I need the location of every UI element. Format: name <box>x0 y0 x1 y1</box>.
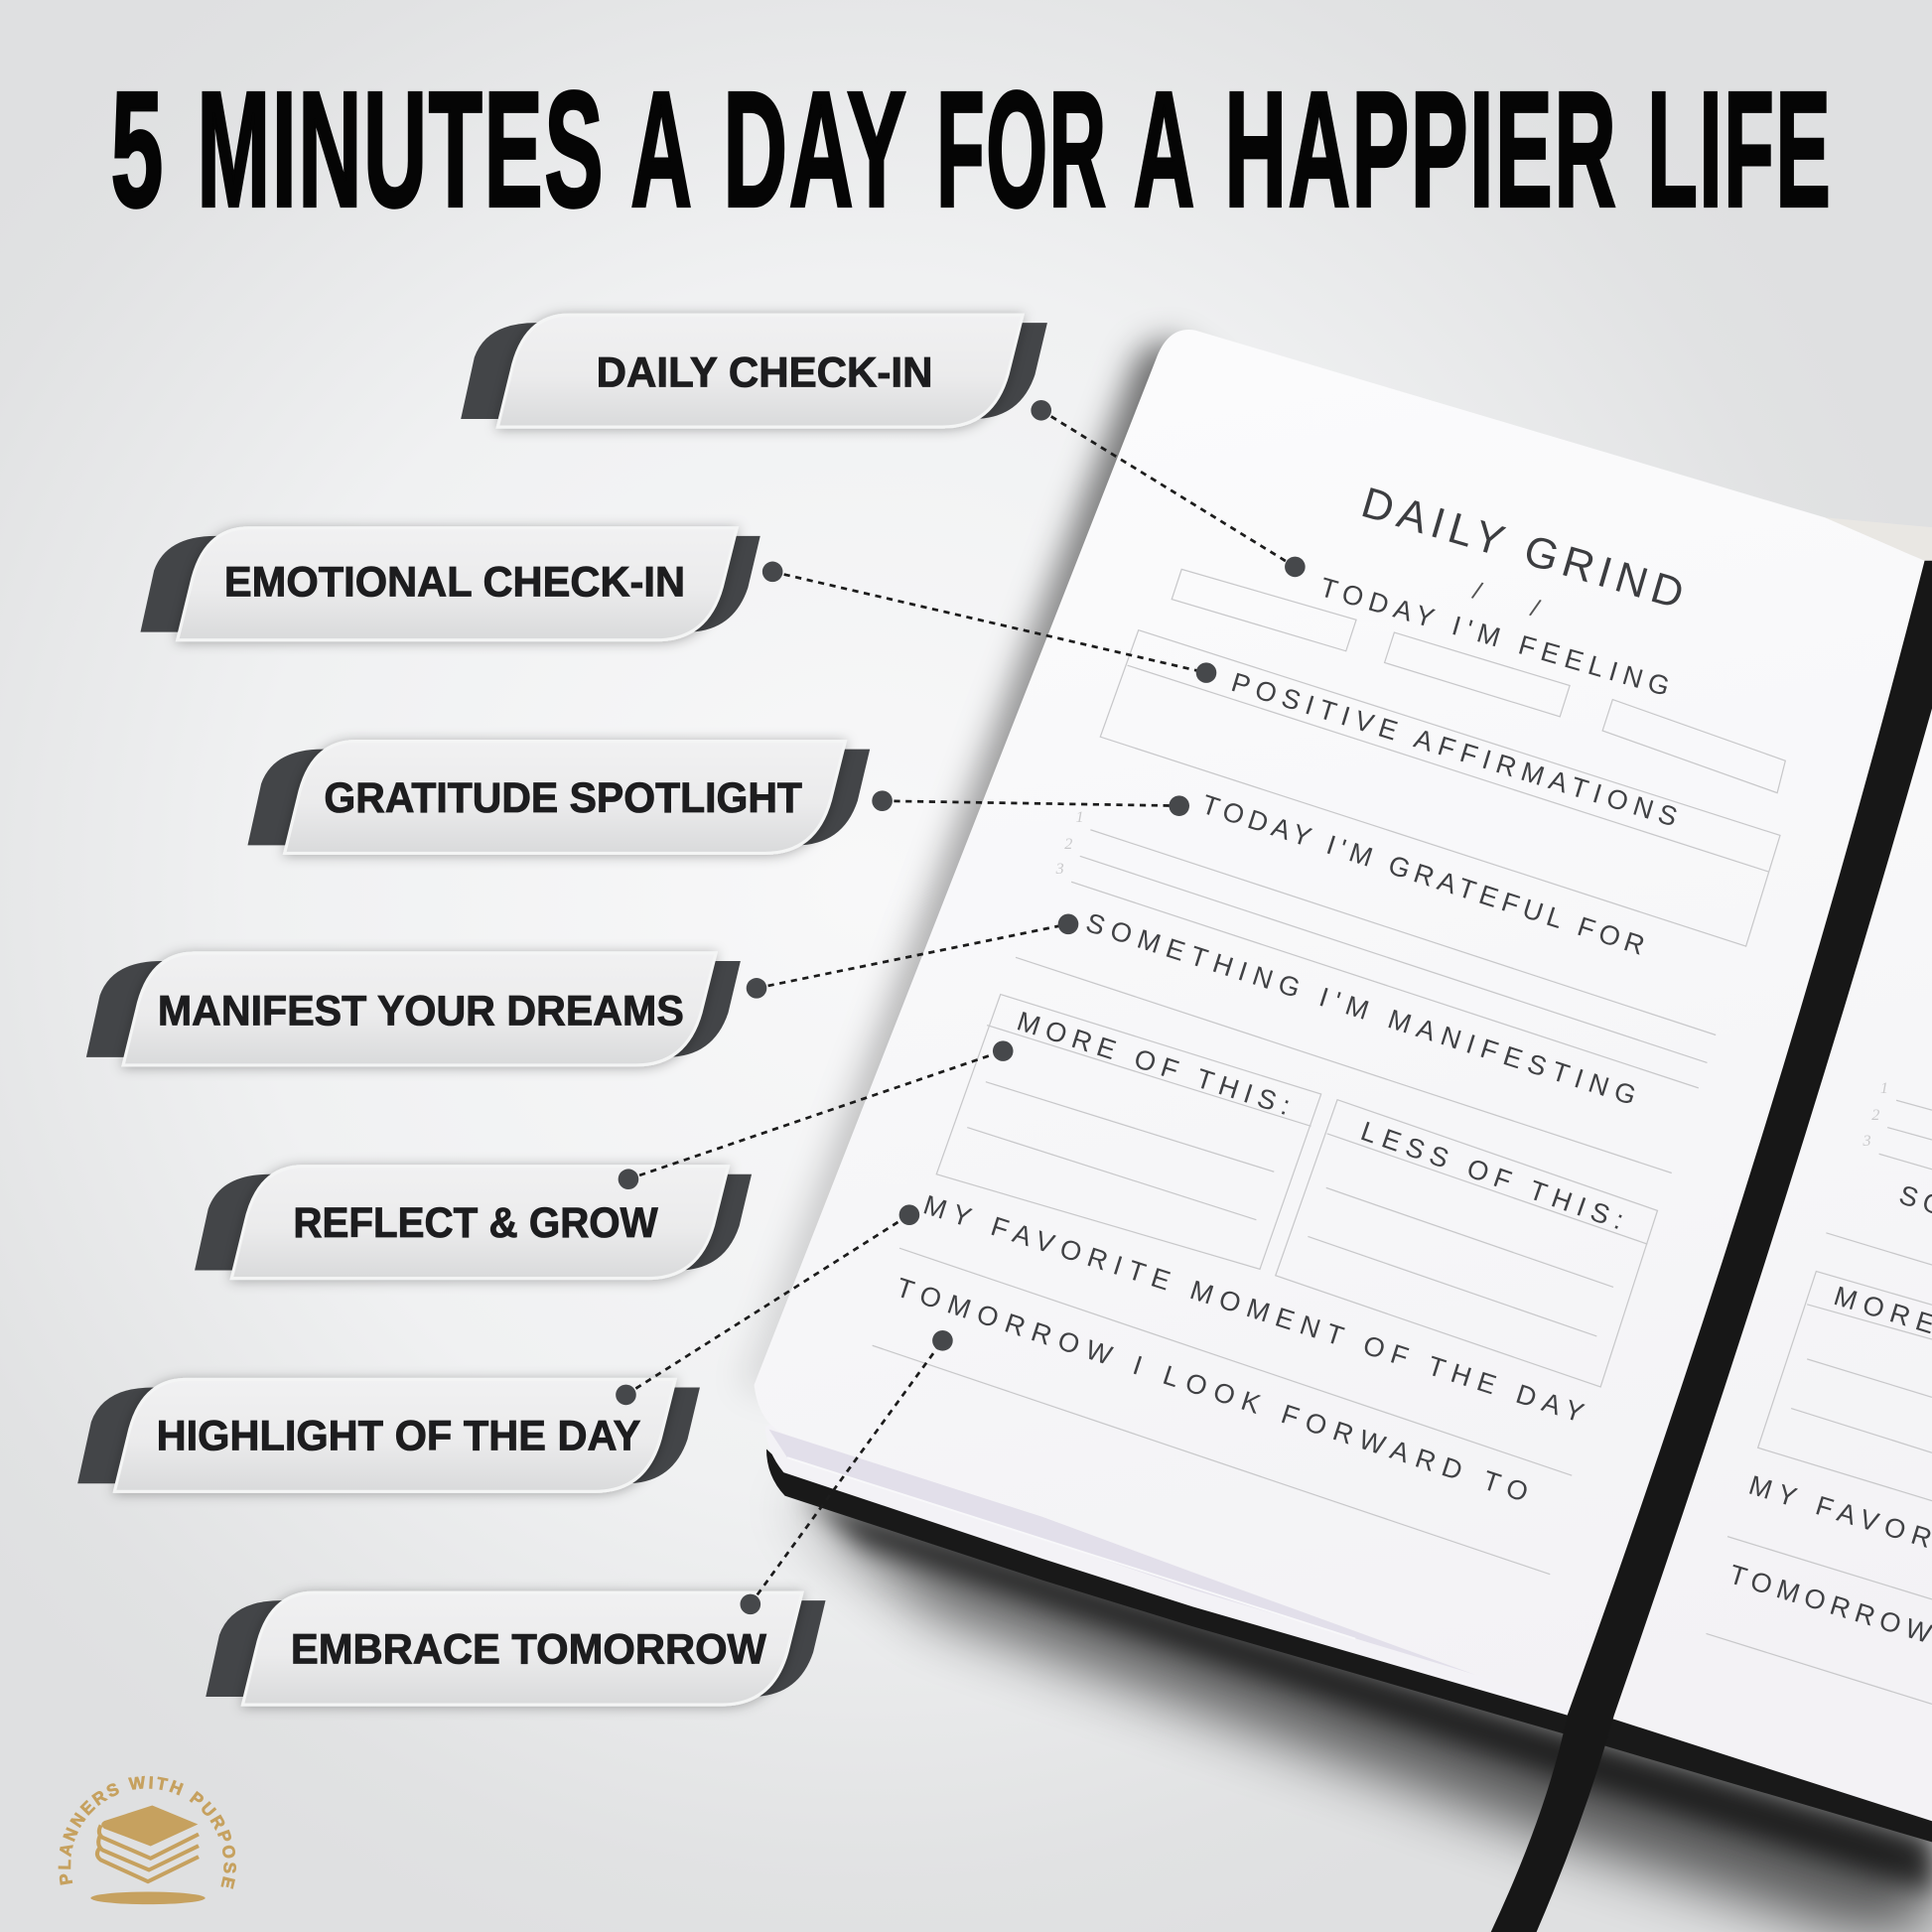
label: emotional check-in: EMOTIONAL CHECK-IN <box>224 559 685 606</box>
page stack <box>765 1417 1601 1716</box>
right page numbers <box>1863 1080 1888 1150</box>
connector: emotional check-in <box>762 562 1216 683</box>
label: reflect and grow: REFLECT & GROW <box>293 1199 658 1246</box>
logo arc text: PLANNERS WITH PURPOSE <box>58 1775 236 1889</box>
date slashes <box>1469 578 1543 622</box>
label: highlight of the day: HIGHLIGHT OF THE DAY <box>157 1413 640 1459</box>
title: A <box>630 58 694 240</box>
right page box <box>1758 1272 1932 1501</box>
page heading: DAILY GRIND <box>1356 479 1689 619</box>
title: MINUTES <box>198 58 605 240</box>
connector: daily check-in <box>1031 400 1306 577</box>
more of this box <box>936 995 1321 1269</box>
right page numbers: 3 <box>1862 1133 1871 1150</box>
favorite moment heading: MY FAVORITE MOMENT OF THE DAY <box>919 1188 1587 1429</box>
logo base ellipse <box>90 1891 206 1904</box>
label: reflect and grow <box>195 1167 752 1279</box>
right page content <box>1707 1080 1932 1704</box>
connector: reflect and grow <box>619 1040 1014 1189</box>
label: daily check-in: DAILY CHECK-IN <box>597 349 932 396</box>
favorite moment line <box>899 1248 1572 1475</box>
notebook <box>740 330 1932 1932</box>
date slashes: / <box>1527 596 1543 622</box>
open page surface <box>755 330 1932 1821</box>
label: embrace tomorrow <box>206 1592 826 1705</box>
tomorrow heading: TOMORROW I LOOK FORWARD TO <box>893 1272 1532 1508</box>
right page tomorrow line <box>1707 1633 1932 1704</box>
gratitude numbers: 2 <box>1064 836 1072 853</box>
right page favorite line <box>1727 1537 1932 1599</box>
title: DAY <box>724 58 908 240</box>
label: highlight of the day <box>77 1379 700 1491</box>
elastic band <box>1491 561 1932 1932</box>
date slashes: / <box>1469 578 1485 606</box>
gratitude numbers <box>1055 809 1084 878</box>
right page manifesting line <box>1826 1233 1932 1265</box>
connector: manifest your dreams <box>747 914 1078 999</box>
feeling boxes <box>1172 569 1785 793</box>
logo: planners with purpose <box>58 1775 236 1904</box>
feeling heading: TODAY I'M FEELING <box>1316 571 1673 702</box>
label: manifest your dreams: MANIFEST YOUR DREAMS <box>158 988 684 1035</box>
affirmations heading: POSITIVE AFFIRMATIONS <box>1228 666 1681 832</box>
manifesting line <box>1016 957 1672 1173</box>
connector: gratitude spotlight <box>872 790 1189 816</box>
label: gratitude spotlight <box>247 742 870 853</box>
title <box>111 58 1832 240</box>
gratitude numbers: 3 <box>1055 861 1064 878</box>
affirmations box <box>1100 630 1780 946</box>
manifesting heading: SOMETHING I'M MANIFESTING <box>1082 906 1640 1111</box>
tomorrow line <box>873 1345 1550 1575</box>
gratitude numbers: 1 <box>1075 809 1084 826</box>
more of this heading: MORE OF THIS: <box>1014 1005 1294 1121</box>
less of this box <box>1276 1100 1657 1387</box>
connector: embrace tomorrow <box>741 1330 953 1614</box>
gratitude heading: TODAY I'M GRATEFUL FOR <box>1198 788 1648 961</box>
label: daily check-in <box>461 315 1047 427</box>
label: embrace tomorrow: EMBRACE TOMORROW <box>291 1625 766 1672</box>
right page gratitude lines <box>1879 1100 1932 1170</box>
book shadow: left edge <box>740 339 1213 1399</box>
label: gratitude spotlight: GRATITUDE SPOTLIGHT <box>324 774 802 821</box>
title: FOR <box>936 58 1108 240</box>
label: emotional check-in <box>140 528 760 640</box>
right page numbers: 2 <box>1871 1107 1879 1124</box>
cover edge <box>766 1449 1932 1842</box>
left page content <box>873 479 1785 1575</box>
less of this heading: LESS OF THIS: <box>1357 1115 1628 1235</box>
right page corner peek <box>1824 517 1932 569</box>
label: manifest your dreams <box>86 953 741 1065</box>
icon: stacked books <box>97 1805 199 1881</box>
connector: highlight of the day <box>616 1204 919 1405</box>
book shadow: bottom tight <box>801 1493 1932 1891</box>
book shadow: bottom wide <box>788 1497 1932 1932</box>
gratitude lines <box>1071 830 1716 1088</box>
title: 5 <box>111 58 165 240</box>
right page numbers: 1 <box>1880 1080 1888 1097</box>
title: A <box>1134 58 1196 240</box>
